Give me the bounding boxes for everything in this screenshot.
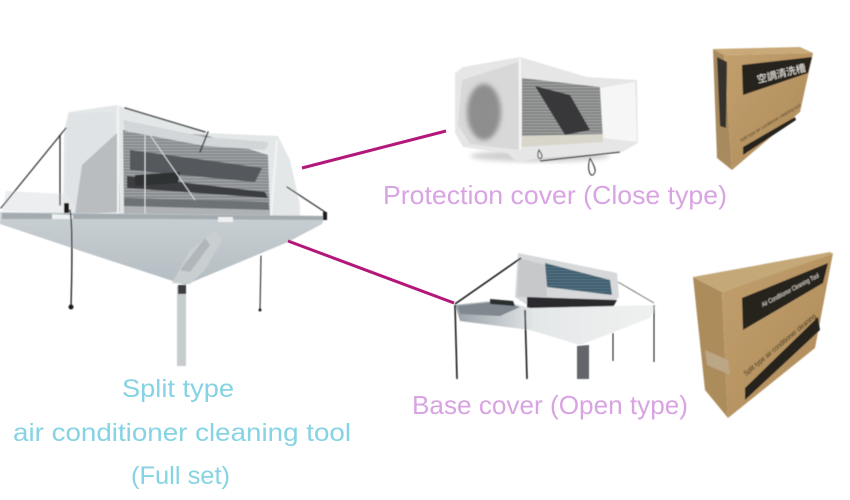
caption: base cover: Base cover (Open type) xyxy=(412,390,688,420)
cardboard box: base cover: Split type air conditioner cleaning xyxy=(743,313,818,378)
caption: split type full set: (Full set) xyxy=(131,462,230,490)
caption: split type full set xyxy=(13,375,351,490)
black brand label xyxy=(742,263,828,330)
silver tray xyxy=(455,300,657,345)
product photo: split type full set xyxy=(0,105,327,366)
cardboard box: protection cover: Split type air conditioner cleaning tool xyxy=(739,103,802,143)
exposed coil behind film xyxy=(123,130,270,216)
connector line to base cover xyxy=(288,241,454,303)
caption: protection cover: Protection cover (Close type) xyxy=(383,180,727,210)
black cords and wires xyxy=(455,258,654,379)
drain pipe xyxy=(177,285,186,366)
cardboard box: protection cover xyxy=(713,47,813,170)
air conditioner unit xyxy=(515,253,619,305)
drain sleeve xyxy=(577,345,589,379)
box label text: Air Conditioner Cleaning Tool xyxy=(760,272,821,309)
enclosed coil xyxy=(522,78,605,137)
plastic film enclosure xyxy=(455,57,638,162)
back tray flap xyxy=(2,191,66,213)
product photo: base cover open type xyxy=(455,253,657,379)
black brand label xyxy=(742,57,812,95)
wrapped air conditioner body xyxy=(63,105,300,217)
caption: split type full set: Split type xyxy=(122,375,234,403)
caption: split type full set: air conditioner cleaning tool xyxy=(13,419,351,447)
tray funnel xyxy=(0,212,325,285)
box faces xyxy=(713,49,732,170)
connector line to protection cover xyxy=(302,131,446,168)
soft shadow xyxy=(470,150,610,162)
cardboard box: base cover xyxy=(693,252,833,418)
product photo: protection cover close type xyxy=(455,57,638,175)
hanging cords and wires xyxy=(1,108,325,310)
lower rail and cord loops xyxy=(538,150,620,175)
box faces xyxy=(693,277,728,418)
box label text: 空調清洗槽 xyxy=(756,61,807,86)
